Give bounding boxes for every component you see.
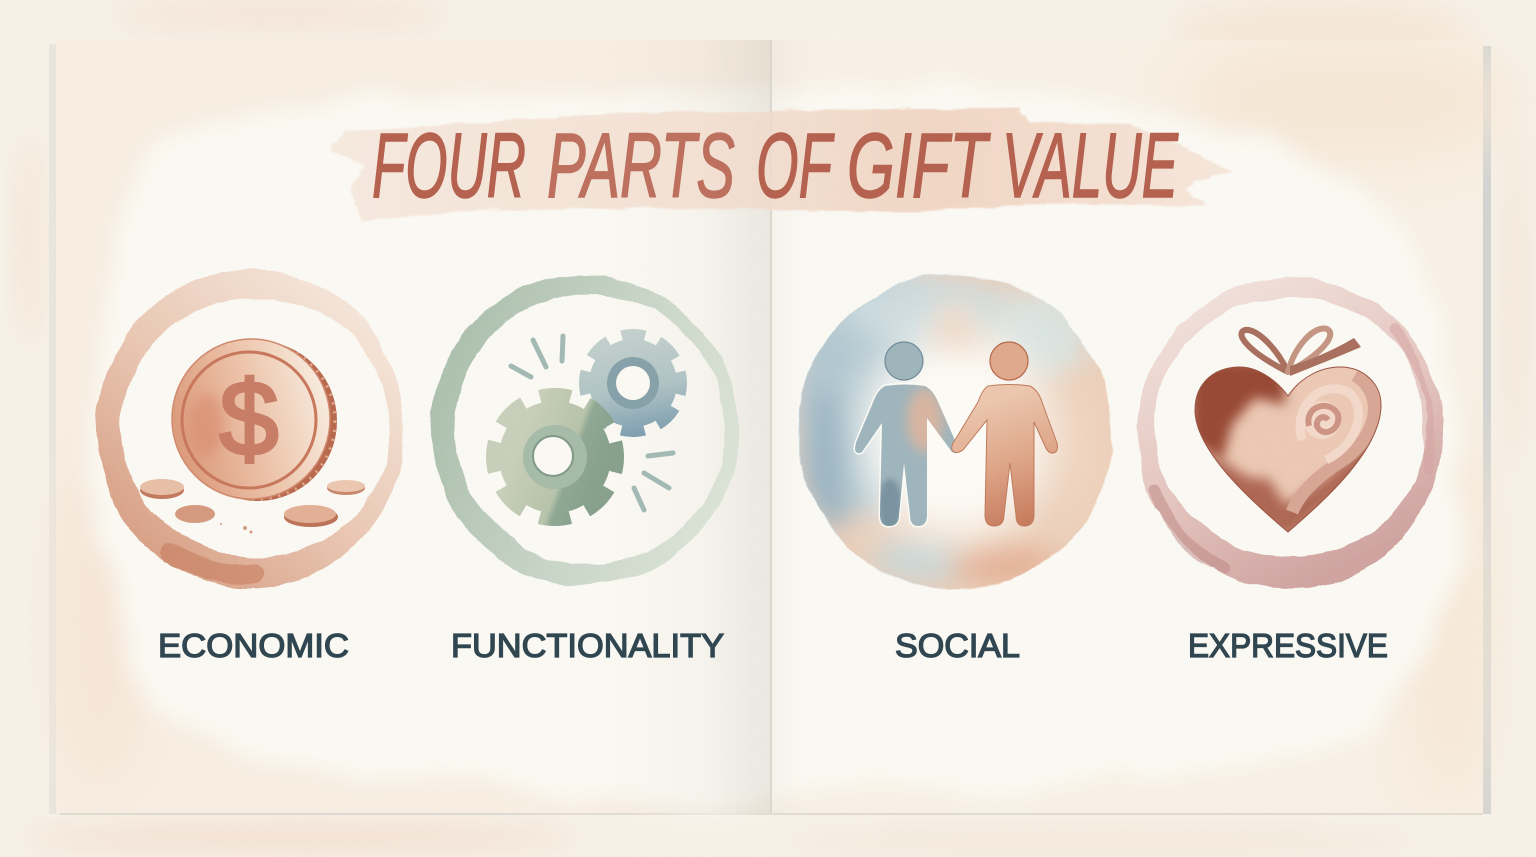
icon: small coins [140, 479, 365, 534]
ring [96, 270, 404, 588]
ring [1137, 278, 1443, 588]
title text: OF [756, 115, 835, 217]
icon: ribbon bow [1241, 328, 1361, 376]
ring dark right wash [1395, 330, 1430, 470]
icon: motion spokes [511, 336, 673, 510]
gutter shadow [600, 40, 770, 813]
icon: right person [952, 342, 1057, 526]
icon: coin [172, 339, 337, 501]
title text [372, 115, 1179, 217]
spiral bands [1292, 375, 1374, 512]
page stack edges [49, 44, 59, 814]
icon: coin: $ [220, 360, 278, 478]
ring dark lower-left wash [1156, 490, 1225, 566]
panel: social [795, 265, 1112, 589]
panel: economic [96, 270, 404, 588]
icon: heart [1194, 366, 1382, 532]
title text: GIFT [847, 115, 991, 217]
pale inner wash [91, 86, 1456, 801]
label: functionality: FUNCTIONALITY [451, 628, 724, 665]
title text: FOUR [372, 115, 526, 217]
peach edge wash [1180, 40, 1520, 160]
ring dark bottom wash [170, 553, 256, 574]
icon: left person [854, 341, 957, 528]
label: social: SOCIAL [895, 628, 1020, 665]
title text: VALUE [1002, 115, 1179, 217]
brush stroke [328, 108, 1232, 221]
labels [158, 628, 1388, 665]
label: economic: ECONOMIC [158, 628, 349, 665]
left page [56, 40, 771, 813]
ring [431, 275, 739, 585]
watercolor disc [795, 265, 1112, 589]
icon: large gear [497, 399, 613, 515]
right page [771, 40, 1483, 813]
title banner [328, 108, 1232, 221]
center glow [859, 330, 1051, 540]
icon: small gear [588, 338, 678, 428]
panel: expressive [1137, 278, 1443, 588]
panel: functionality [431, 275, 739, 585]
title text: PARTS [547, 115, 735, 217]
label: expressive: EXPRESSIVE [1188, 628, 1388, 665]
